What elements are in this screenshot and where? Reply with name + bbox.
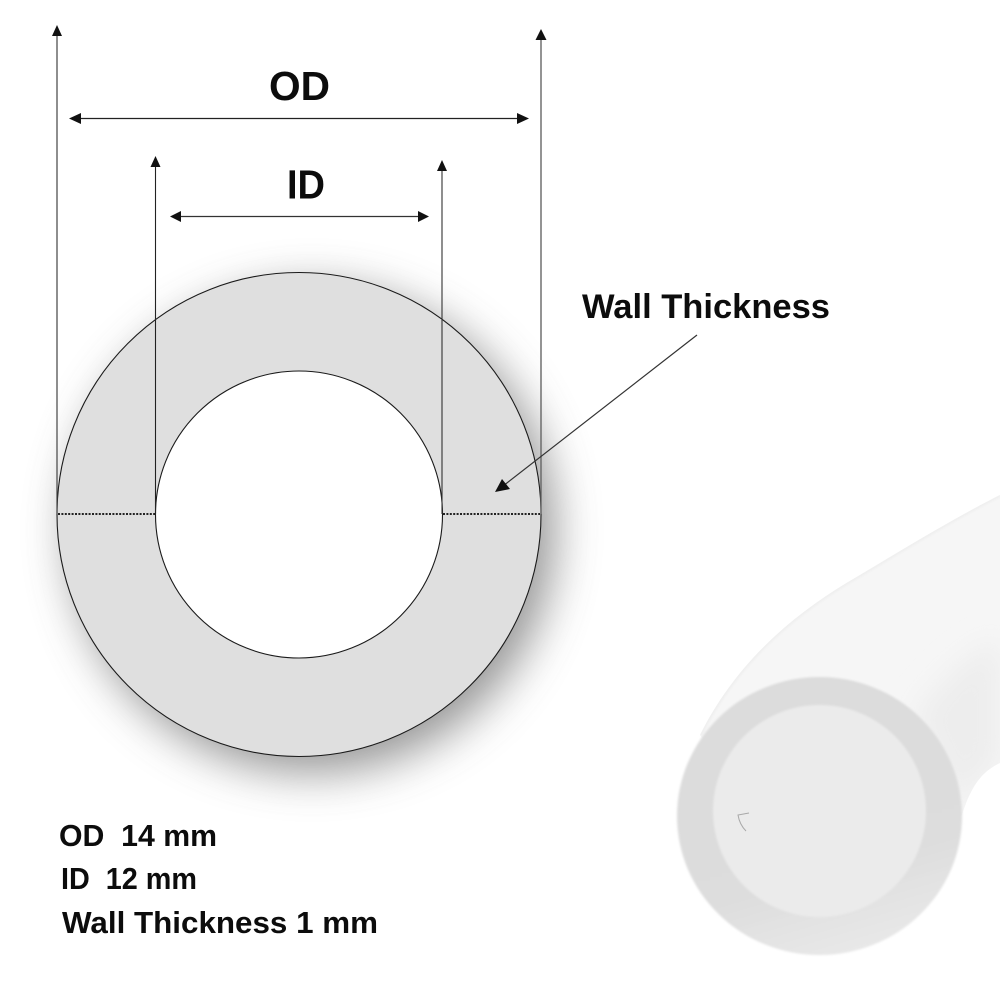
- photo: bent white tube: [677, 495, 1000, 955]
- arrow: ID left extension: [150, 156, 160, 514]
- heading: ID: ID: [287, 162, 325, 208]
- tube bore: [713, 705, 926, 917]
- spec: OD: OD 14 mm: [59, 818, 217, 853]
- dotted diameter line right: [443, 513, 540, 515]
- arrow: ID right extension: [437, 160, 447, 514]
- outer wall ring: [57, 272, 541, 756]
- arrow: OD right extension: [536, 29, 546, 514]
- heading: OD: OD: [269, 63, 330, 109]
- tube body: [700, 495, 1000, 900]
- panel: tube cross-section diagram: [57, 272, 554, 772]
- spec: ID: ID 12 mm: [61, 861, 197, 896]
- label: Wall Thickness: Wall Thickness: [582, 288, 830, 326]
- arrow: OD dimension: [69, 113, 529, 124]
- tube end wall: [677, 677, 962, 955]
- arrow: wall thickness leader: [495, 335, 697, 492]
- arrow: OD left extension: [52, 25, 62, 514]
- tube body shading: [942, 680, 982, 763]
- arrow: ID dimension: [170, 211, 429, 222]
- inner bore: [156, 371, 442, 658]
- dotted diameter line left: [58, 513, 156, 515]
- ring drop shadow: [70, 288, 554, 772]
- bore scratches: [738, 813, 749, 831]
- spec: wall thickness: Wall Thickness 1 mm: [62, 905, 378, 940]
- text block: specifications: [59, 818, 378, 940]
